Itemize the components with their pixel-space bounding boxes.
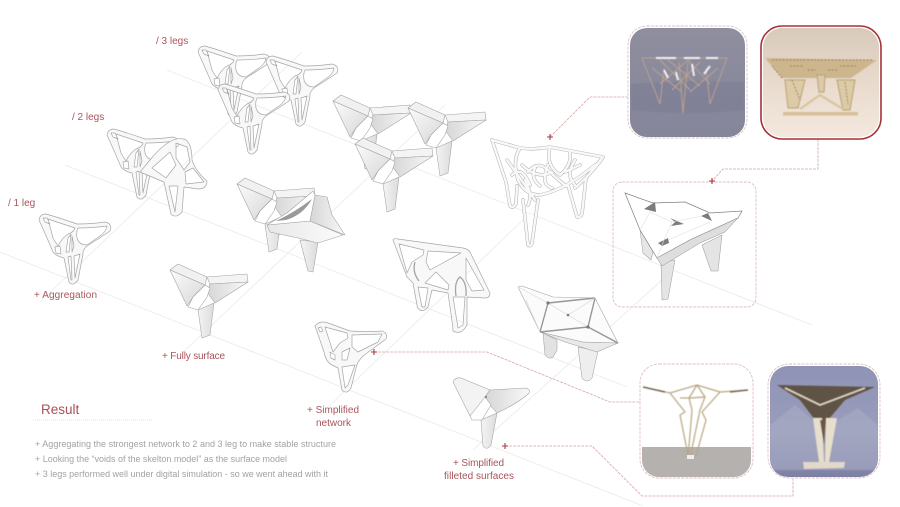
label: simplified filleted surfaces: filleted surfaces [444,471,514,482]
connector: network model to photo [550,97,628,137]
plus marker: simplified network [371,349,377,355]
connector: simplified network to photo [374,352,640,402]
connector: red photo to surface model [712,139,818,181]
text block: result notes: + Aggregating the strongest network to 2 and 3 leg to make stable structure [35,439,336,449]
chair: three surfaces [333,95,486,212]
chair: two surfaces [237,178,345,272]
label: 1 leg: / 1 leg [8,198,35,209]
plus marker: network chair [547,134,553,140]
chair: simplified network [315,322,386,392]
label: fully surface: + Fully surface [162,351,225,362]
heading divider [33,419,152,421]
panel: surface model [613,182,756,307]
label: simplified network: network [316,418,352,429]
panel: photo of dark wood model [768,364,880,478]
chair: 2 legs network [107,129,207,216]
connector: simplified surfaces to photo [505,446,793,496]
chair: 3 legged network [492,140,603,246]
chair: simplified 3 leg network [393,239,490,332]
label: 3 legs: / 3 legs [156,36,188,47]
text block: result notes [35,439,336,479]
label: simplified network: + Simplified [307,405,359,416]
chair: simplified filleted surface [453,378,530,448]
chair: fully surface [170,264,248,338]
heading: result: Result [41,402,80,417]
label: aggregation: + Aggregation [34,290,97,301]
chair: 3 leg panel surface [518,286,618,381]
panel: photo of branching wood model [640,364,753,478]
panel: photo of white chair [628,26,747,138]
text block: result notes: + Looking the “voids of the skelton model” as the surface model [35,454,287,464]
chair: 3 legs network [198,46,338,154]
plus marker: filleted surfaces [502,443,508,449]
plus marker: surface model [709,178,715,184]
panel: photo of wood chair, highlighted [761,26,881,139]
chair: 1 leg network [39,214,111,284]
text block: result notes: + 3 legs performed well under digital simulation - so we went ahead with it [35,469,328,479]
label: simplified filleted surfaces: + Simplified [453,458,504,469]
label: 2 legs: / 2 legs [72,112,104,123]
